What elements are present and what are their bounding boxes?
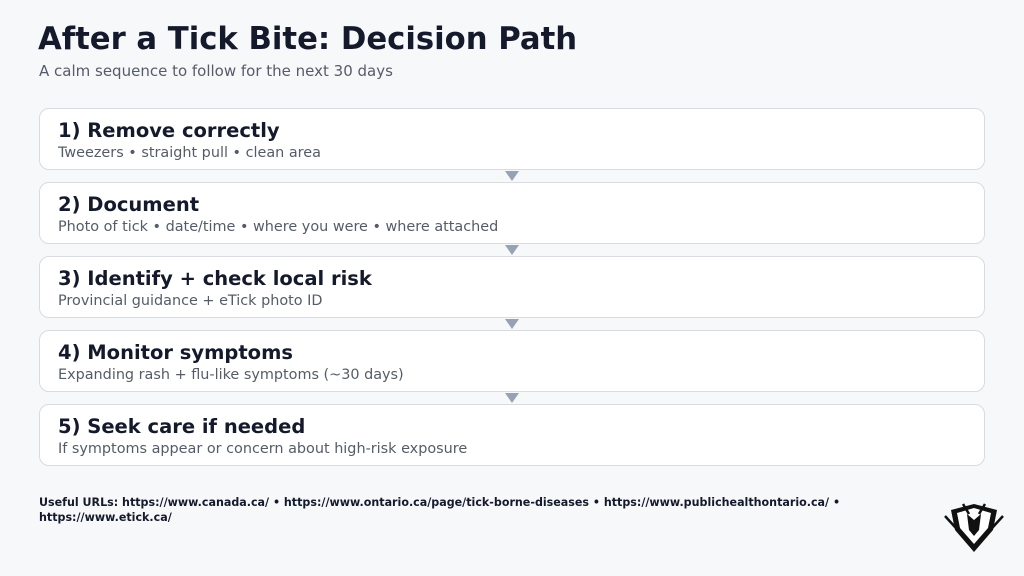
- card: step 4: Expanding rash + flu-like symptoms (~30 days): [58, 367, 404, 383]
- card: step 1: Tweezers • straight pull • clean area: [58, 145, 321, 161]
- useful urls: https://www.etick.ca/: [39, 511, 172, 524]
- useful urls: [39, 496, 840, 524]
- arrow 1: [505, 171, 519, 181]
- card: step 5: [39, 404, 985, 466]
- icon: logo: [944, 503, 1004, 552]
- card: step 3: 3) Identify + check local risk: [58, 267, 372, 290]
- card: step 1: 1) Remove correctly: [58, 119, 280, 142]
- subtitle: A calm sequence to follow for the next 30 days: [39, 62, 393, 80]
- title: After a Tick Bite: Decision Path: [38, 22, 577, 57]
- useful urls: Useful URLs: https://www.canada.ca/ • https://www.ontario.ca/page/tick-borne-diseases • https://www.publichealthontario.ca/ •: [39, 496, 840, 509]
- card: step 2: 2) Document: [58, 193, 199, 216]
- card: step 1: [39, 108, 985, 170]
- card: step 3: Provincial guidance + eTick photo ID: [58, 293, 322, 309]
- card: step 5: If symptoms appear or concern about high-risk exposure: [58, 441, 467, 457]
- arrow 4: [505, 393, 519, 403]
- card: step 2: Photo of tick • date/time • where you were • where attached: [58, 219, 498, 235]
- card: step 2: [39, 182, 985, 244]
- arrow 3: [505, 319, 519, 329]
- arrow 2: [505, 245, 519, 255]
- card: step 4: [39, 330, 985, 392]
- card: step 3: [39, 256, 985, 318]
- card: step 4: 4) Monitor symptoms: [58, 341, 293, 364]
- card: step 5: 5) Seek care if needed: [58, 415, 305, 438]
